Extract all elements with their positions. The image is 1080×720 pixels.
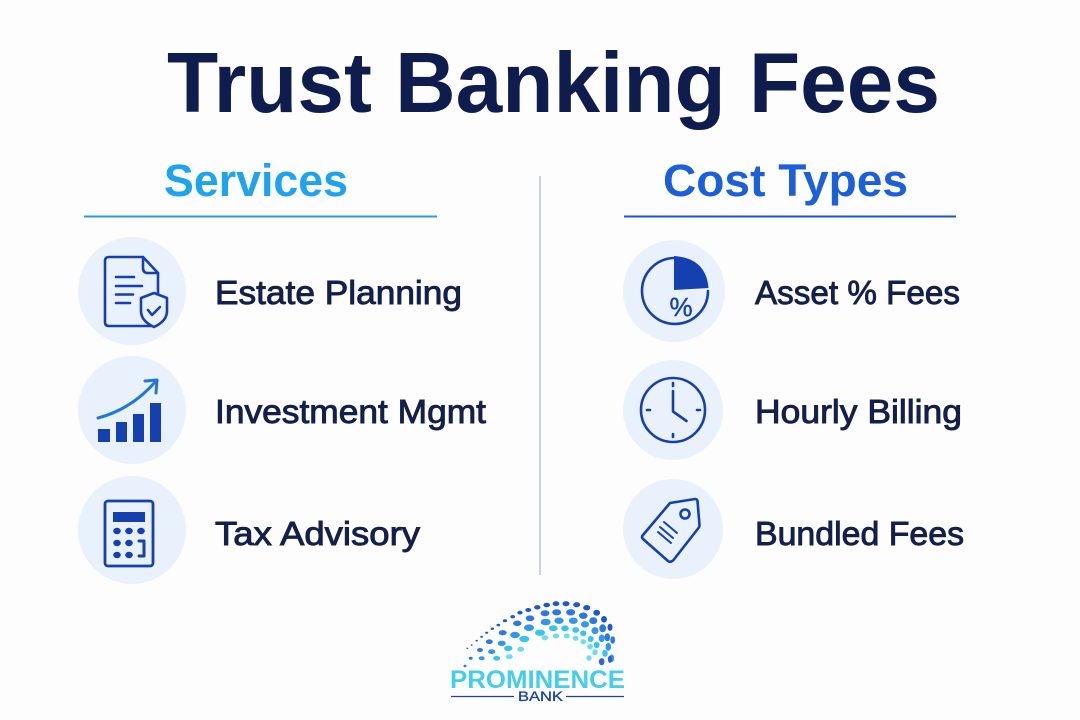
title: Trust Banking Fees xyxy=(167,36,940,131)
label: estate planning: Estate Planning xyxy=(215,274,462,311)
heading: services: Services xyxy=(164,155,348,206)
icon: investment growth chart xyxy=(78,356,186,464)
icon: price tag xyxy=(623,479,723,579)
icon: asset percent pie xyxy=(623,240,725,342)
logo dots xyxy=(464,601,615,667)
icon: calculator xyxy=(78,476,186,584)
heading underline: cost types xyxy=(624,216,956,218)
label: bundled fees: Bundled Fees xyxy=(755,515,964,552)
heading underline: services xyxy=(84,216,437,218)
label: hourly billing: Hourly Billing xyxy=(755,393,962,430)
heading: cost types: Cost Types xyxy=(663,155,908,206)
icon: estate document with shield xyxy=(78,237,186,345)
center divider xyxy=(539,176,541,575)
logo: prominence bank xyxy=(450,601,625,704)
logo wordmark: PROMINENCE xyxy=(450,666,625,694)
label: investment mgmt: Investment Mgmt xyxy=(215,393,486,430)
logo subtitle: BANK xyxy=(518,688,564,704)
logo rules xyxy=(451,696,624,698)
label: asset percent fees: Asset % Fees xyxy=(755,274,960,311)
panel: cost types xyxy=(623,155,964,579)
label: tax advisory: Tax Advisory xyxy=(215,515,421,552)
icon: asset percent pie: % xyxy=(669,292,693,322)
icon: clock xyxy=(623,360,723,460)
panel: services xyxy=(78,155,486,584)
